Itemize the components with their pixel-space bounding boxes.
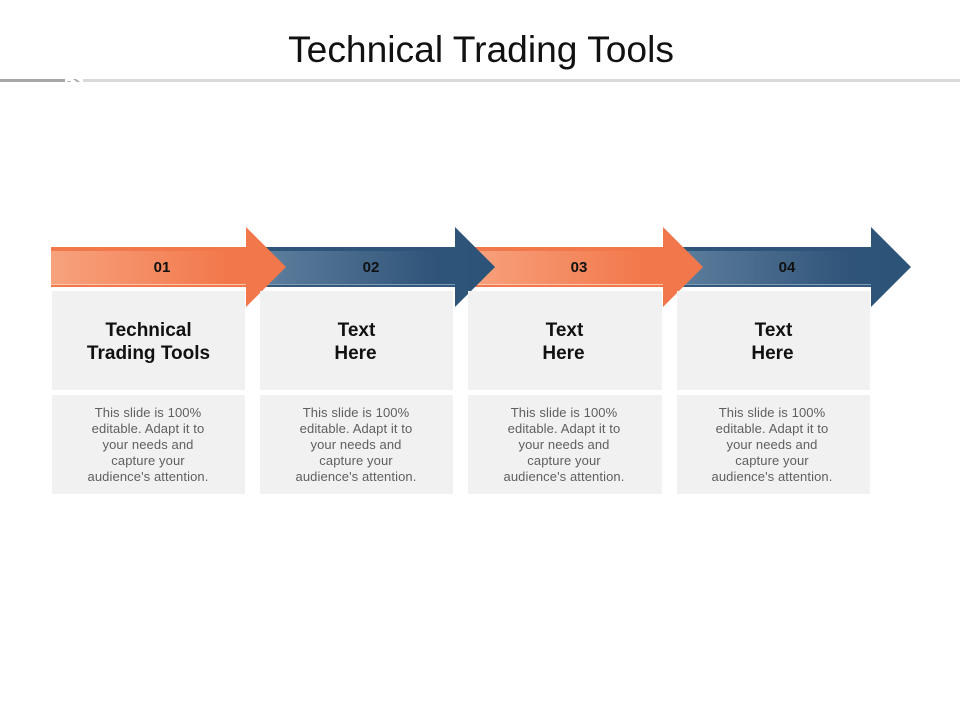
arrow 04: 04 (779, 259, 796, 276)
panel: description 1 (52, 395, 245, 494)
panel: heading 2: Text (338, 320, 375, 341)
panel: heading 2: Here (334, 343, 377, 364)
panel: heading 1: Trading Tools (87, 343, 210, 364)
panel: description 2: your needs and (310, 437, 402, 452)
panel: heading 4: Text (755, 320, 792, 341)
panel: heading 3 (468, 291, 662, 390)
panel: description 4: capture your (735, 453, 809, 468)
panel: description 3: audience's attention. (504, 469, 624, 484)
panel: description 3 (468, 395, 662, 494)
title rule (0, 79, 960, 82)
arrow 02: 02 (363, 259, 379, 276)
panel: description 4: editable. Adapt it to (716, 421, 828, 436)
arrow 03: 03 (571, 259, 587, 276)
panel: heading 3: Text (546, 320, 583, 341)
panel: heading 4 (677, 291, 870, 390)
panel: description 2: capture your (319, 453, 393, 468)
panel: heading 1 (52, 291, 245, 390)
panel: description 4: audience's attention. (712, 469, 832, 484)
arrow 01 (51, 227, 286, 307)
panel: description 2: This slide is 100% (303, 405, 409, 420)
panel: description 3: editable. Adapt it to (508, 421, 620, 436)
arrow chain (51, 227, 911, 307)
panel: heading 4: Here (751, 343, 794, 364)
arrow 01: 01 (154, 259, 170, 276)
panel: description 1: capture your (111, 453, 185, 468)
panel: description 2 (260, 395, 453, 494)
panel: description 1: This slide is 100% (95, 405, 201, 420)
panel: description 2: audience's attention. (296, 469, 416, 484)
panel: description 1: audience's attention. (88, 469, 208, 484)
panel: description 3: your needs and (518, 437, 610, 452)
panel: description 3: This slide is 100% (511, 405, 617, 420)
arrow 04 (672, 227, 911, 307)
arrow 03 (468, 227, 703, 307)
panel: description 2: editable. Adapt it to (300, 421, 412, 436)
panel: description 1: your needs and (102, 437, 194, 452)
panel: description 1: editable. Adapt it to (92, 421, 204, 436)
panel: heading 2 (260, 291, 453, 390)
panel: description 4: This slide is 100% (719, 405, 825, 420)
title: Technical Trading Tools (288, 28, 674, 70)
panel: description 4: your needs and (726, 437, 818, 452)
panel: heading 1: Technical (105, 320, 192, 341)
arrow 02 (260, 227, 495, 307)
panel: heading 3: Here (542, 343, 585, 364)
panel: description 3: capture your (527, 453, 601, 468)
panel: description 4 (677, 395, 870, 494)
